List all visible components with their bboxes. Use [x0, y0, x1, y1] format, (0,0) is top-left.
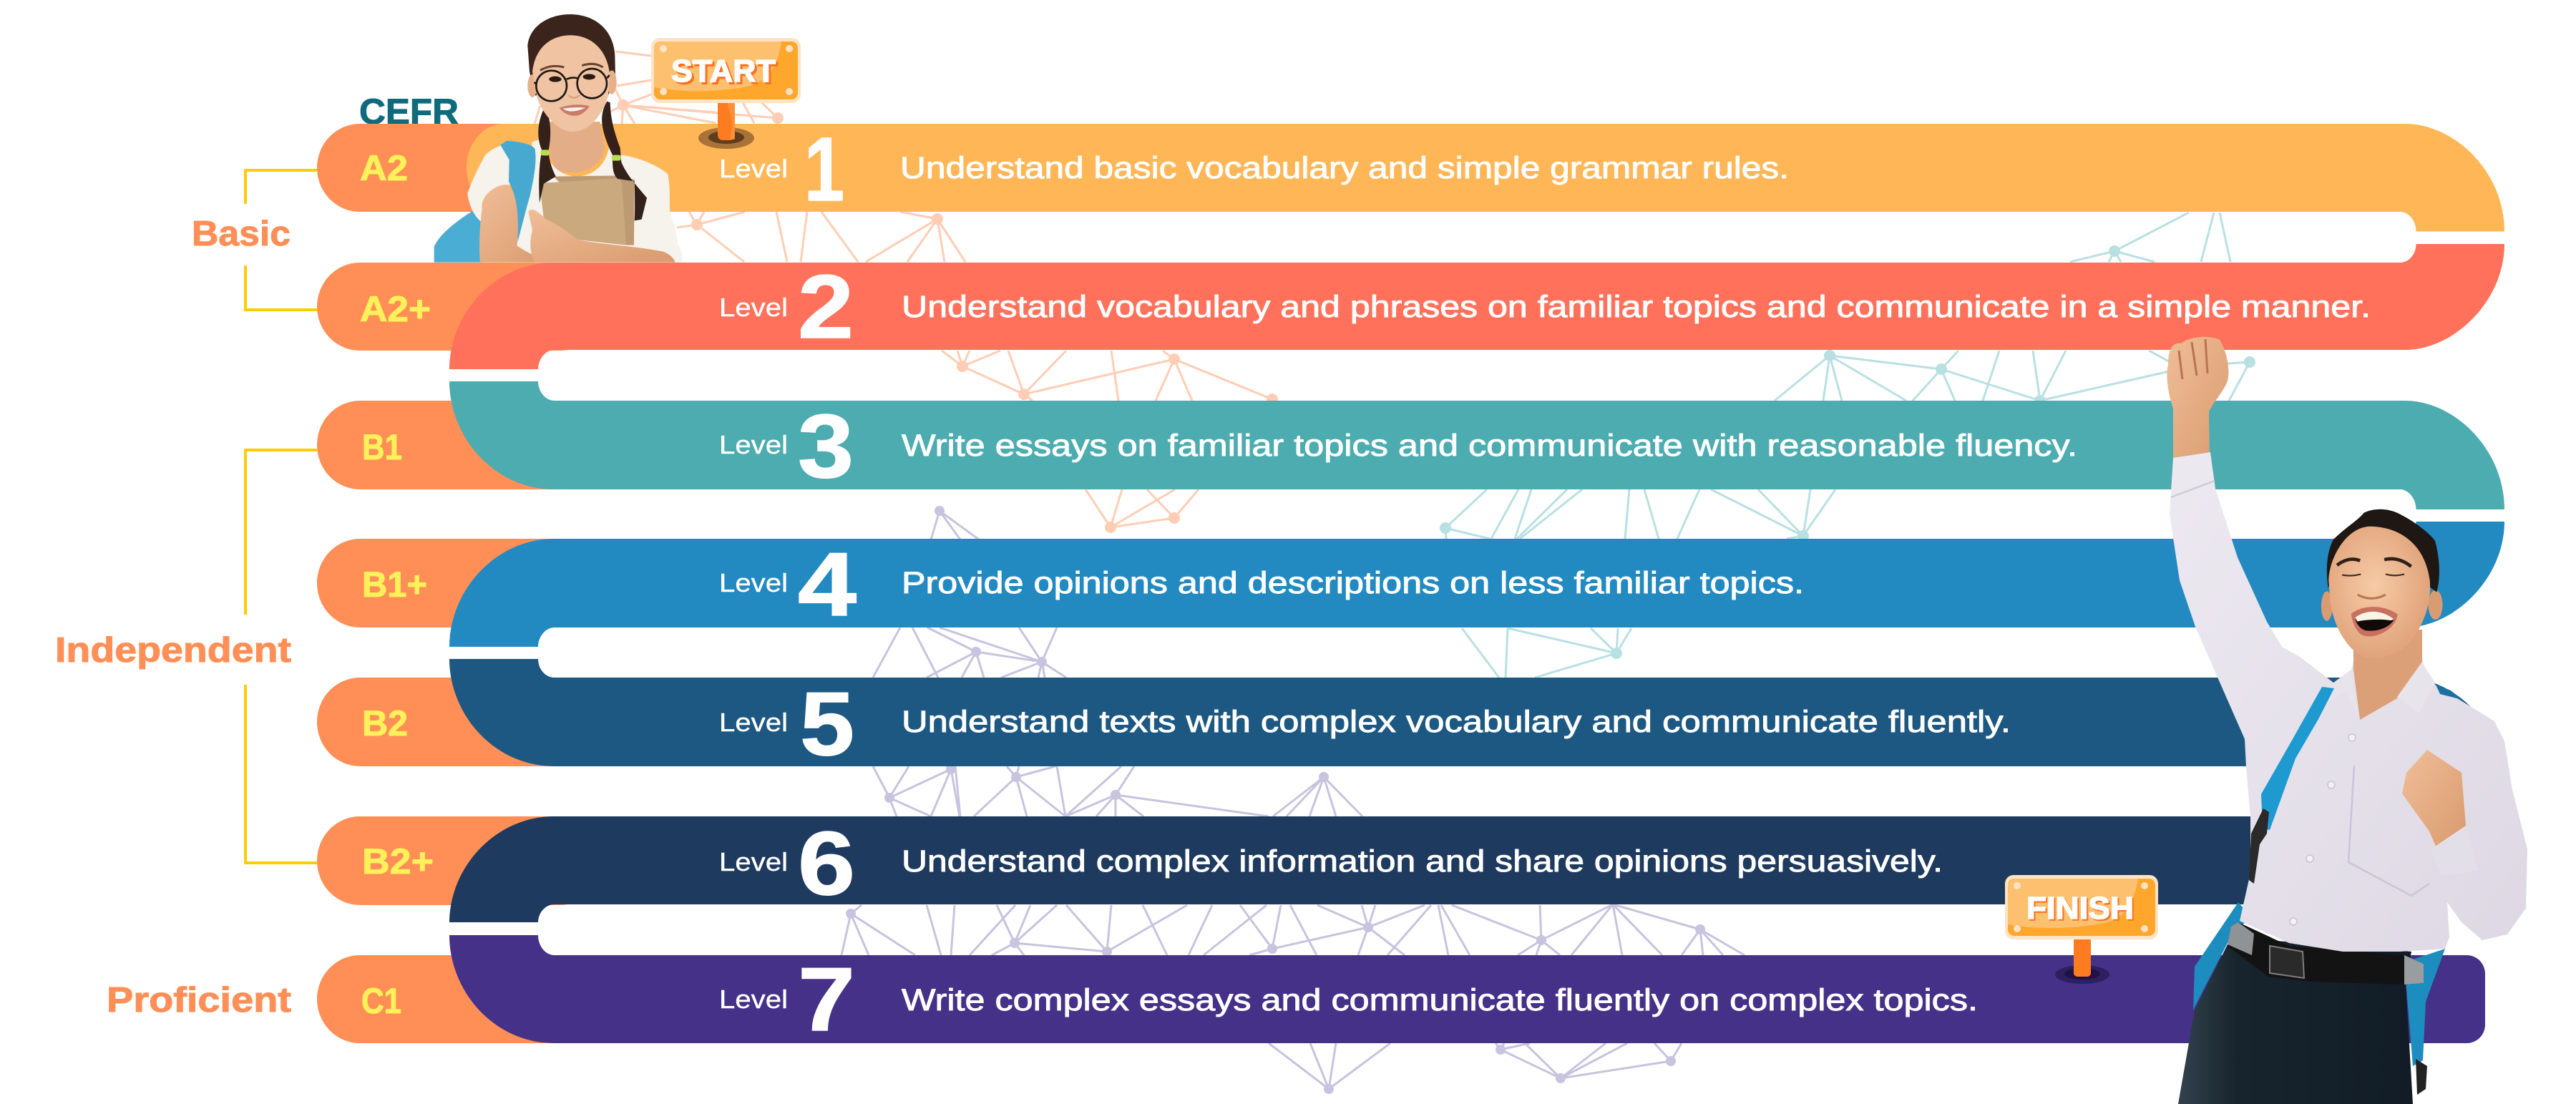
- shirt: [517, 140, 683, 263]
- row: level 2: [719, 256, 2371, 357]
- row: level 6: Understand complex information and share opinions persuasively.: [902, 844, 1943, 879]
- START sign post: [698, 102, 754, 149]
- FINISH sign: FINISH: [2028, 892, 2135, 927]
- CEFR pills column: [317, 124, 603, 1043]
- row: level 6: Level: [719, 847, 788, 876]
- row: level 4: Provide opinions and descriptions on less familiar topics.: [902, 566, 1804, 600]
- heading: CEFR: CEFR: [359, 92, 459, 132]
- face: [2328, 527, 2430, 658]
- head in zoom coordinates: [2321, 509, 2443, 658]
- network: teal plexus background: [1440, 213, 2255, 678]
- row: level 3: Level: [719, 430, 788, 459]
- forearm and hand: [528, 210, 675, 263]
- girl with backpack and books: [434, 14, 683, 263]
- label: Basic: Basic: [192, 215, 291, 253]
- collar right: [2397, 662, 2435, 713]
- face: [532, 35, 610, 132]
- braids: [538, 109, 556, 202]
- label: Independent: Independent: [55, 631, 291, 670]
- row: level 1: [719, 119, 1789, 220]
- upper arm: [479, 185, 551, 263]
- shirt: [2170, 452, 2527, 952]
- ears: [2321, 591, 2333, 621]
- neck: [550, 122, 605, 172]
- row: level 7: [719, 949, 1978, 1050]
- bar: level 7: [449, 935, 2485, 1043]
- belt: [2228, 922, 2424, 985]
- bar: level 4: [449, 522, 2504, 647]
- CEFR codes: B2: [362, 703, 408, 743]
- row: level 2: 2: [798, 256, 854, 357]
- row: level 2: Understand vocabulary and phrases on familiar topics and communicate in a simple manner.: [902, 290, 2371, 324]
- CEFR codes: B1: [362, 427, 402, 467]
- smile: [560, 104, 590, 116]
- strap buckle: [2249, 809, 2269, 884]
- bar: level 3: [449, 381, 2504, 509]
- CEFR codes: C1: [361, 981, 401, 1021]
- row: level 6: 6: [798, 813, 855, 914]
- eyes: [549, 77, 562, 82]
- row: level 6: [719, 813, 1943, 914]
- FINISH sign: [2005, 875, 2158, 984]
- row: level 1: Understand basic vocabulary and simple grammar rules.: [900, 151, 1789, 185]
- bracket: Independent group: [245, 450, 317, 863]
- CEFR codes: A2+: [360, 289, 431, 329]
- eyebrows: [2337, 560, 2360, 565]
- eyebrows: [540, 66, 564, 70]
- closed eyes: [2342, 574, 2361, 576]
- row: level 1: 1: [804, 119, 844, 220]
- START sign board: START: [673, 56, 778, 91]
- laughing mouth: [2351, 607, 2398, 636]
- bar: level 2: [449, 244, 2504, 369]
- network: purple plexus background: [841, 506, 1745, 1094]
- shirt buttons: [2290, 734, 2356, 925]
- row: level 7: Level: [719, 985, 788, 1014]
- backpack strap: [500, 141, 536, 242]
- row: level 3: Write essays on familiar topics and communicate with reasonable fluency.: [902, 429, 2077, 463]
- backpack right: [2404, 949, 2445, 1066]
- row: level 4: [719, 534, 1804, 635]
- bracket: Basic group: [245, 170, 317, 310]
- trousers: [2178, 937, 2413, 1104]
- hair back: [527, 14, 615, 95]
- CEFR codes: B2+: [362, 841, 434, 881]
- label: Proficient: Proficient: [107, 981, 291, 1020]
- ears: [527, 74, 537, 97]
- hair: [2327, 509, 2439, 592]
- backpack left: [2193, 902, 2250, 1010]
- row: level 4: 4: [798, 534, 857, 635]
- row: level 7: Write complex essays and communicate fluently on complex topics.: [902, 983, 1978, 1017]
- sleeve cuff raised arm: [2171, 481, 2215, 497]
- boy cheering: [2167, 337, 2527, 1104]
- network: orange plexus background: [535, 52, 1278, 533]
- CEFR codes: B1+: [362, 565, 427, 605]
- nose: [569, 95, 580, 98]
- row: level 2: Level: [719, 293, 788, 322]
- backpack: [434, 211, 483, 263]
- START sign board: [651, 38, 801, 103]
- FINISH sign: FINISH: [2026, 891, 2134, 926]
- START sign board: START: [671, 54, 776, 89]
- bar: level 5: [449, 659, 2504, 786]
- backpack strap rear: [2436, 685, 2462, 700]
- row: level 5: Understand texts with complex vocabulary and communicate fluently.: [902, 705, 2011, 739]
- neck: [2353, 630, 2422, 720]
- front book: [540, 178, 626, 245]
- shirt cuff: [2431, 826, 2478, 876]
- CEFR codes: A2: [360, 148, 408, 188]
- back book: [553, 175, 635, 245]
- bar: level 1: [467, 124, 2504, 232]
- collar left: [2319, 670, 2358, 718]
- row: level 5: Level: [719, 708, 788, 737]
- row: level 3: [719, 396, 2077, 497]
- backpack strap front: [2261, 687, 2334, 830]
- nose: [2358, 595, 2386, 598]
- row: level 7: 7: [798, 949, 855, 1050]
- row: level 5: [719, 673, 2011, 774]
- row: level 3: 3: [798, 396, 854, 497]
- row: level 4: Level: [719, 568, 788, 597]
- lower fist: [2402, 750, 2466, 849]
- shirt pocket: [2348, 766, 2429, 896]
- glasses: [535, 69, 610, 101]
- hair ties: [541, 150, 550, 155]
- backpack clip: [2416, 1059, 2427, 1095]
- raised forearm and fist: [2167, 337, 2228, 463]
- row: level 5: 5: [800, 673, 854, 774]
- row: level 1: Level: [719, 154, 788, 183]
- CEFR codes: [360, 148, 434, 1021]
- bar: level 6: [449, 798, 2504, 922]
